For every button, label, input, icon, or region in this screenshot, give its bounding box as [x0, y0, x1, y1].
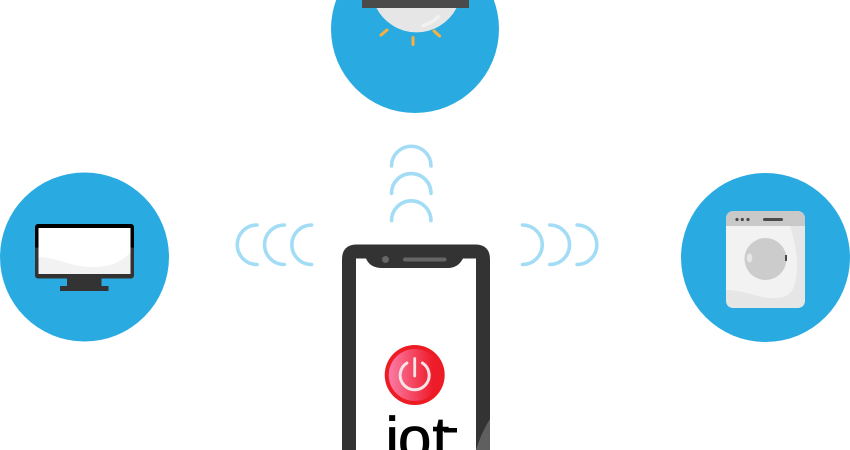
power button [385, 345, 445, 405]
phone body [342, 244, 490, 450]
icon: washing machine [681, 173, 850, 342]
icon: television [0, 172, 169, 342]
signal arcs: right [522, 225, 597, 264]
icon: ceiling lamp [331, 0, 499, 113]
signal arcs: left [237, 225, 312, 264]
phone screen [356, 258, 476, 450]
smartphone [342, 244, 490, 450]
signal arcs: up [392, 146, 431, 221]
camera [382, 256, 389, 263]
speaker [403, 258, 446, 262]
frame sheen [476, 419, 490, 450]
